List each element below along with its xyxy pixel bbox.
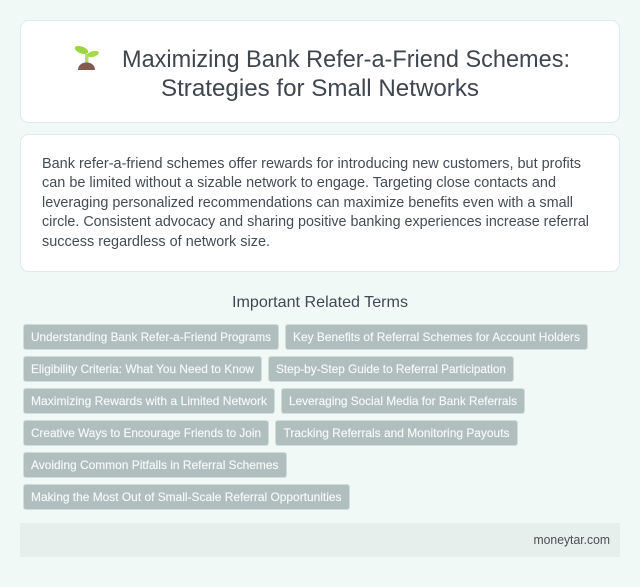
icon: seedling [74,44,99,70]
panel: summary paragraph: can be limited without a sizable network to engage. Targeting close contacts and [42,175,556,191]
tag: Avoiding Common Pitfalls in Referral Schemes [31,458,278,472]
footer bar [20,523,620,557]
title: Strategies for Small Networks [161,75,479,102]
tag: Understanding Bank Refer-a-Friend Programs [31,330,271,344]
panel: summary paragraph: Bank refer-a-friend schemes offer rewards for introducing new customers, but profits [42,156,581,172]
tag: Tracking Referrals and Monitoring Payouts [284,426,510,440]
tag [24,452,286,478]
tag: Eligibility Criteria: What You Need to Know [31,362,254,376]
panel: summary paragraph: circle. Consistent advocacy and sharing positive banking experiences increase referral [42,214,589,230]
panel: summary paragraph: success regardless of network size. [42,234,270,250]
tag [24,484,350,510]
title [122,46,570,102]
tag: Creative Ways to Encourage Friends to Join [31,426,261,440]
tag [268,356,514,382]
tag [276,420,518,446]
heading: important related terms: Important Related Terms [232,294,408,311]
tag [282,388,524,414]
tag [24,388,274,414]
tag [286,324,588,350]
tag [24,420,268,446]
tag: Step-by-Step Guide to Referral Participation [276,362,506,376]
panel: summary paragraph: leveraging personalized recommendations can maximize benefits even with a small [42,195,573,211]
tag: Key Benefits of Referral Schemes for Account Holders [293,330,580,344]
header card [20,20,620,122]
tag [24,324,278,350]
tag list [24,324,588,510]
footer source: moneytar.com [534,533,610,547]
tag: Leveraging Social Media for Bank Referrals [289,394,517,408]
tag: Making the Most Out of Small-Scale Referral Opportunities [31,490,342,504]
title: Maximizing Bank Refer-a-Friend Schemes: [122,46,570,73]
panel: summary paragraph [20,134,620,272]
tag [24,356,262,382]
tag: Maximizing Rewards with a Limited Network [31,394,268,408]
